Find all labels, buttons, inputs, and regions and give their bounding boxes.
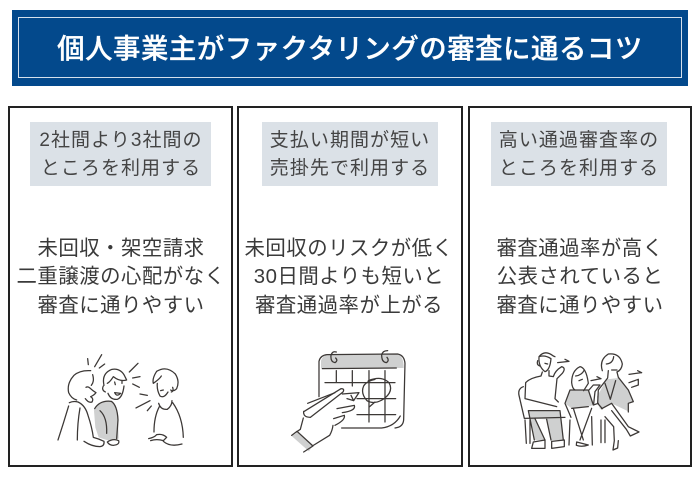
icon: three people talking (58, 355, 183, 447)
panel: 2 companies vs 3 companies (8, 106, 233, 467)
icon: hand marking a calendar (292, 351, 405, 452)
title frame and text (18, 17, 682, 78)
icon: three people seated (519, 353, 642, 450)
text: panel 2 body: 審査通過率が上がる (255, 295, 443, 317)
text: panel 3 body: 公表されていると (497, 266, 663, 288)
text: panel 1 body (17, 238, 225, 317)
label: panel 3 heading (491, 122, 667, 186)
text: panel 2 body: 30日間よりも短いと (254, 266, 444, 288)
text: panel 1 body: 審査に通りやすい (37, 295, 205, 317)
title frame and text: 個人事業主がファクタリングの審査に通るコツ (57, 33, 643, 64)
label: panel 2 heading: 売掛先で利用する (270, 158, 430, 179)
label: panel 2 heading (262, 122, 438, 186)
text: panel 2 body (245, 238, 453, 317)
text: panel 1 body: 未回収・架空請求 (37, 238, 205, 260)
label: panel 1 heading (30, 122, 211, 186)
label: panel 1 heading: ところを利用する (41, 158, 201, 179)
panel: high approval rate (468, 106, 692, 467)
title banner (12, 10, 688, 86)
text: panel 3 body (496, 238, 664, 317)
label: panel 3 heading: 高い通過審査率の (499, 130, 659, 151)
text: panel 3 body: 審査に通りやすい (496, 295, 664, 317)
label: panel 1 heading: 2社間より3社間の (39, 130, 203, 151)
text: panel 3 body: 審査通過率が高く (496, 238, 664, 260)
text: panel 1 body: 二重譲渡の心配がなく (17, 266, 225, 288)
label: panel 3 heading: ところを利用する (499, 158, 659, 179)
text: panel 2 body: 未回収のリスクが低く (245, 238, 453, 260)
label: panel 2 heading: 支払い期間が短い (270, 130, 430, 151)
panel: short payment terms (237, 106, 463, 467)
